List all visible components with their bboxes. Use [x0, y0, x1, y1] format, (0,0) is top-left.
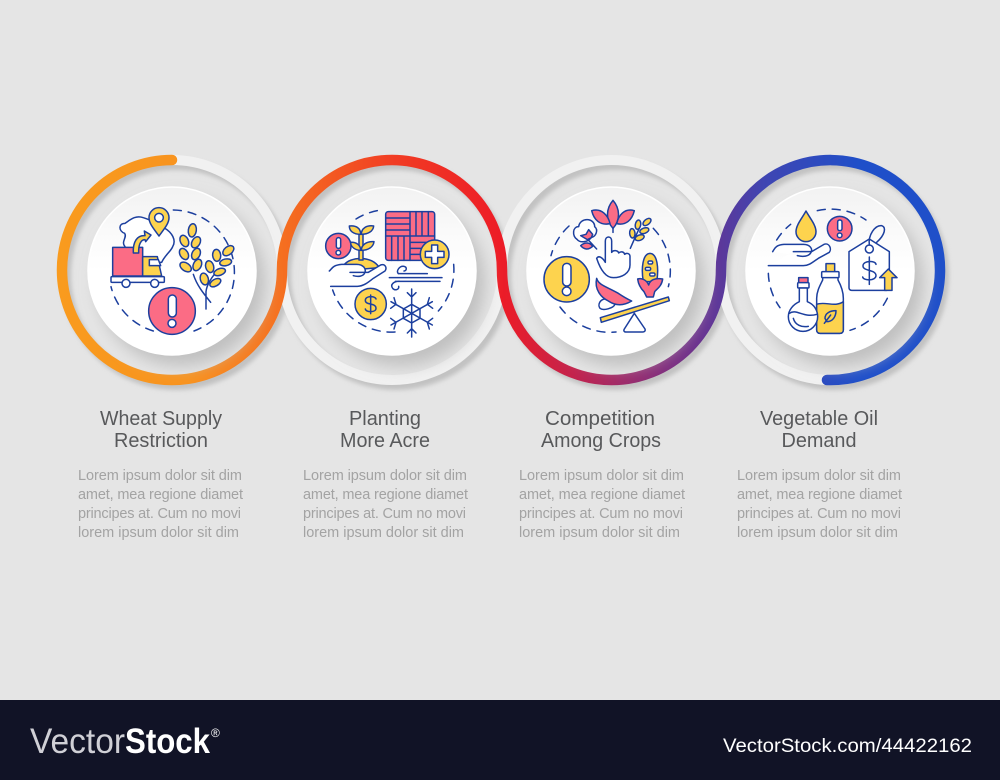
disc 2: [308, 187, 485, 366]
step 2 title: [340, 408, 430, 452]
flask: [799, 278, 808, 283]
step 1 title: Restriction: [114, 430, 208, 452]
step 1 text: amet, mea regione diamet: [78, 487, 243, 503]
step 2 text: lorem ipsum dolor sit dim: [303, 525, 464, 541]
step 1 text: principes at. Cum no movi: [78, 506, 241, 522]
step 3 title: [541, 408, 661, 452]
stock id: VectorStock.com/44422162: [723, 736, 972, 757]
step 4 title: Vegetable Oil: [760, 408, 878, 430]
hand: [768, 244, 830, 266]
icon: vegetable oil demand: [768, 209, 897, 333]
wind: [389, 266, 442, 290]
warning: [827, 216, 852, 241]
small wheat: [630, 227, 640, 248]
dollar coin: [355, 288, 386, 320]
seesaw: [600, 297, 669, 322]
step 4 text: Lorem ipsum dolor sit dim: [737, 468, 901, 484]
step 1 text: Lorem ipsum dolor sit dim: [78, 468, 242, 484]
warning small: [326, 233, 351, 259]
light ring segments: [172, 160, 827, 380]
wheat: [193, 270, 218, 309]
warning: [544, 257, 589, 302]
ribbon shadow: [66, 165, 944, 385]
step 2 title: Planting: [349, 408, 421, 430]
cloud map: [120, 217, 174, 262]
step 2 text: [303, 468, 468, 541]
hand: [329, 264, 386, 286]
price tag: [849, 239, 889, 290]
step 4 title: [760, 408, 878, 452]
bean pod: [599, 299, 615, 309]
step 3 text: Lorem ipsum dolor sit dim: [519, 468, 684, 484]
disc 3: [527, 187, 704, 366]
step 3 text: principes at. Cum no movi: [519, 506, 683, 522]
oil bottle: [817, 272, 843, 333]
step 4 title: Demand: [782, 430, 856, 452]
step 3 text: [519, 468, 685, 541]
truck: [113, 247, 143, 276]
leaves: [607, 200, 619, 228]
logo: ®: [211, 726, 220, 740]
step 4 text: [737, 468, 902, 541]
disc 1: [88, 187, 265, 366]
cotton: [574, 220, 597, 242]
footer bar: [0, 700, 1000, 780]
snowflake: [391, 289, 433, 337]
step 3 text: lorem ipsum dolor sit dim: [519, 525, 680, 541]
curved arrow: [133, 231, 151, 253]
step 1 title: Wheat Supply: [100, 408, 222, 430]
up arrow: [880, 269, 897, 290]
pointing hand: [597, 237, 630, 278]
icon: planting more acre: [326, 211, 454, 337]
logo: Stock: [125, 722, 210, 761]
step 4 text: principes at. Cum no movi: [737, 506, 901, 522]
logo: Vector: [30, 722, 125, 761]
logo: [30, 722, 220, 761]
step 1 text: lorem ipsum dolor sit dim: [78, 525, 239, 541]
plus: [420, 240, 449, 269]
step 3 title: Competition: [545, 408, 655, 430]
location pin: [149, 208, 169, 236]
step 1 text: [78, 468, 243, 541]
gradient ribbon: [62, 160, 940, 380]
icon: wheat supply restriction: [111, 208, 236, 334]
plant: [344, 258, 379, 269]
step 3 text: amet, mea regione diamet: [519, 487, 685, 503]
step 1 title: [100, 408, 222, 452]
step 2 text: Lorem ipsum dolor sit dim: [303, 468, 467, 484]
step 2 text: amet, mea regione diamet: [303, 487, 468, 503]
icon: competition among crops: [544, 200, 670, 332]
disc 4: [746, 187, 923, 366]
step 2 text: principes at. Cum no movi: [303, 506, 466, 522]
corn: [642, 253, 658, 282]
step 4 text: lorem ipsum dolor sit dim: [737, 525, 898, 541]
step 4 text: amet, mea regione diamet: [737, 487, 902, 503]
warning: [149, 288, 195, 334]
step 3 title: Among Crops: [541, 430, 661, 452]
parquet: [386, 212, 435, 260]
step 2 title: More Acre: [340, 430, 430, 452]
oil drop: [796, 211, 816, 242]
